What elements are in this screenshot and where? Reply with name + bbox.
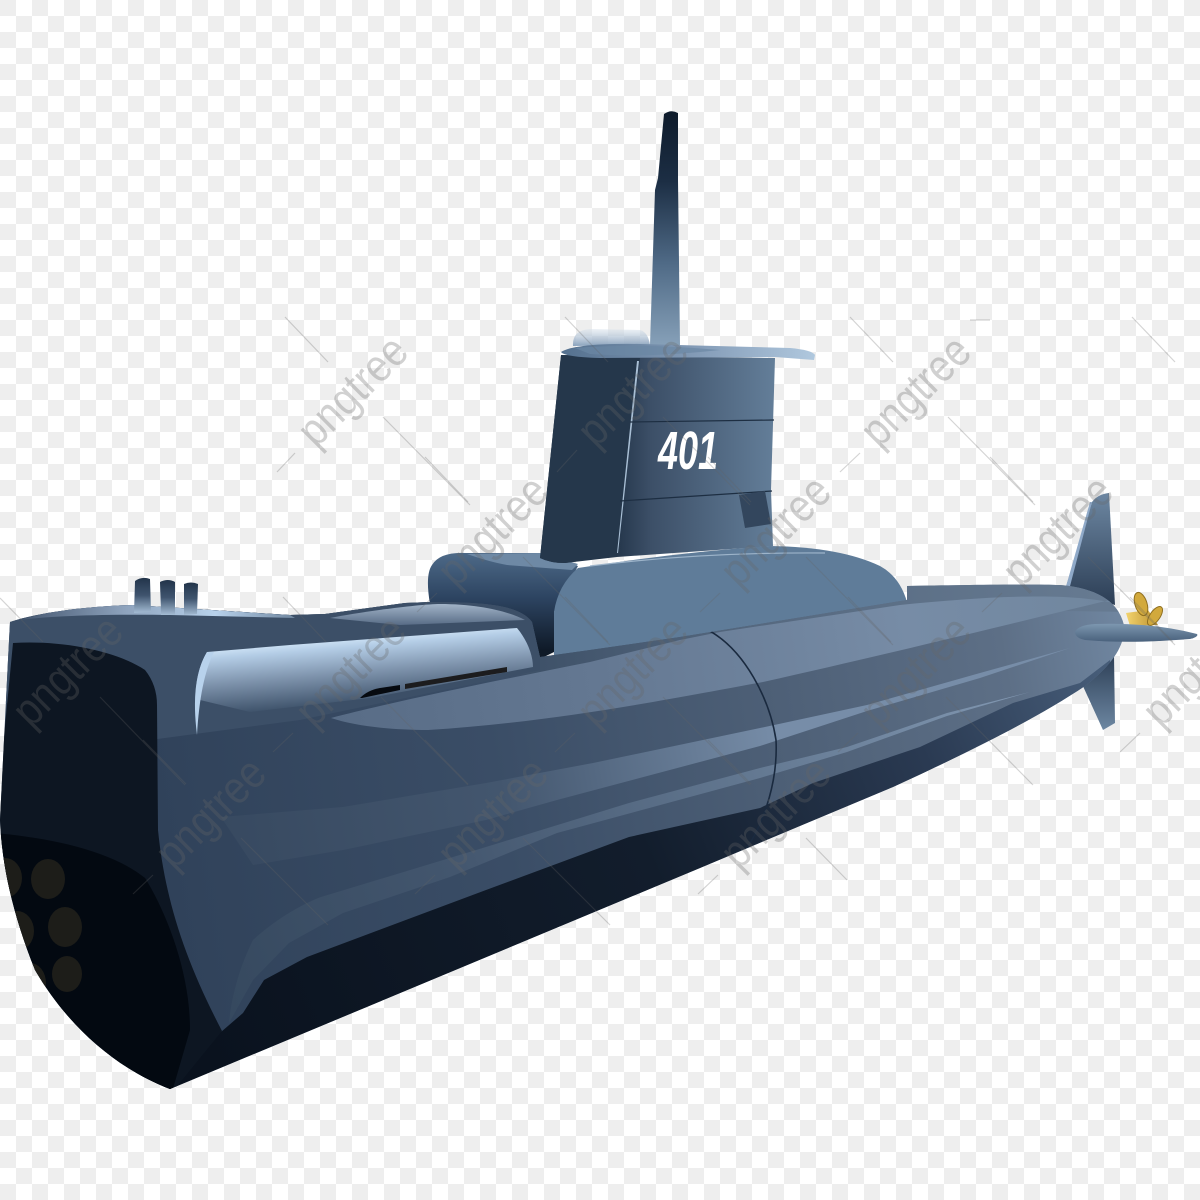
bow dark panel: [0, 642, 222, 1095]
side lens: [331, 596, 1125, 730]
sail (conning tower): [540, 355, 775, 563]
pngtree watermark: pngtree: [566, 605, 698, 736]
raised deck fairing, light side: [554, 546, 907, 657]
pngtree watermark: pngtree: [426, 747, 558, 878]
pngtree watermark: pngtree: [709, 747, 841, 878]
mid deck lens: [330, 604, 525, 625]
pngtree watermark: pngtree: [566, 325, 698, 456]
pngtree watermark: pngtree: [144, 747, 276, 878]
top deck shine: [20, 605, 295, 620]
sail cap: [561, 329, 815, 360]
hull upper-left deck: [6, 602, 427, 739]
propeller: [1126, 591, 1165, 628]
periscope mast: [650, 111, 680, 345]
torpedo tubes: [4, 858, 82, 992]
deck highlight line: [590, 553, 825, 566]
deck slit: [360, 667, 507, 698]
keel band: [120, 660, 1110, 1100]
pngtree watermark: pngtree: [991, 465, 1123, 596]
pngtree watermark: pngtree: [849, 605, 981, 736]
hull number: 401: [657, 421, 718, 481]
sail panel line upper: [630, 420, 774, 422]
streak wide, running into the upper stern streak: [434, 649, 1066, 828]
pngtree watermark: pngtree: [286, 325, 418, 456]
sail panel line lower: [620, 491, 772, 501]
sail dark left face: [540, 355, 640, 563]
pngtree watermark: pngtree: [426, 465, 558, 596]
pngtree watermark: pngtree: [849, 325, 981, 456]
lower stern fin: [1082, 655, 1115, 730]
forward panel sliver: [195, 652, 214, 735]
hull ring seam: [708, 630, 776, 848]
hull top band: [200, 584, 1118, 657]
pngtree watermark: [1, 325, 1200, 878]
sail edge highlight: [617, 361, 639, 553]
stern planes: [1075, 624, 1197, 642]
pngtree watermark: pngtree: [284, 605, 416, 736]
fairing top wedge: [467, 553, 578, 570]
hull base body: [0, 570, 1135, 1110]
raised deck fairing, dark end: [428, 553, 578, 659]
sail vent: [739, 491, 771, 528]
bow lower panel: [0, 833, 190, 1092]
pngtree watermark: pngtree: [709, 465, 841, 596]
watermark diagonal lines: [0, 317, 1175, 925]
forward pipes: [134, 578, 198, 615]
streak lower: [308, 692, 1027, 922]
forward panel highlight: [195, 628, 533, 710]
pngtree watermark: pngtree: [1, 605, 133, 736]
hull: [0, 560, 1135, 1110]
upper stern fin: [1065, 493, 1115, 605]
